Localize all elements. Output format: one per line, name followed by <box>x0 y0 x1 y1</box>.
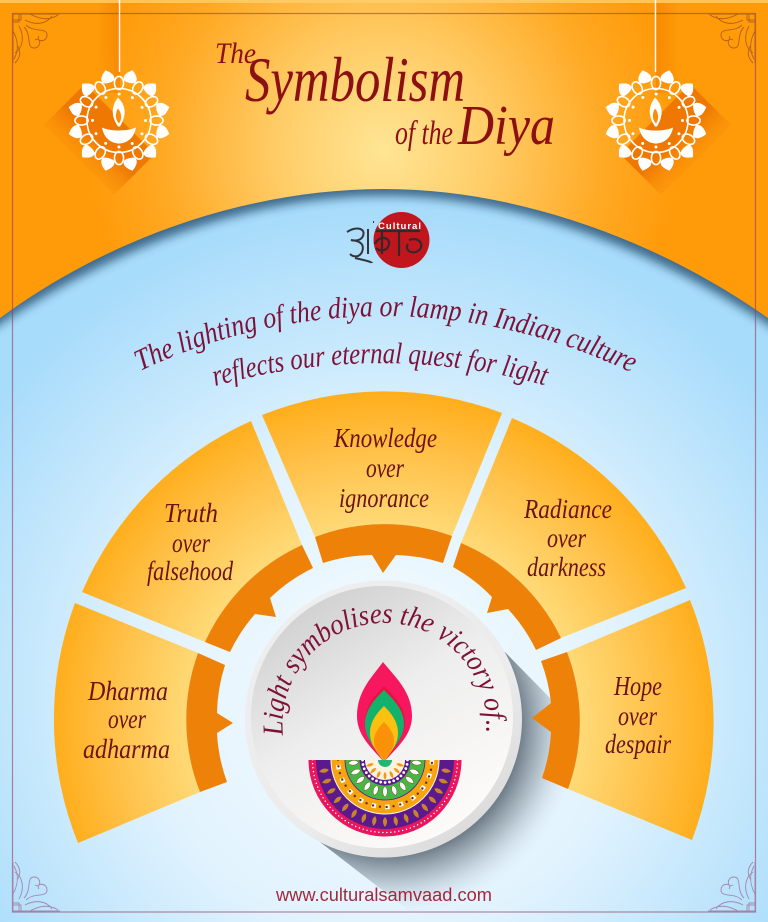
diya rangoli bowl <box>308 760 462 836</box>
segment: Knowledge over ignorance: Knowledge <box>333 423 437 453</box>
corner ornament: top left <box>13 14 60 63</box>
title: Diya <box>457 95 555 157</box>
plate long shadow <box>285 652 640 922</box>
logo: Cultural <box>378 221 421 232</box>
orange curved banner <box>0 0 768 318</box>
segment: Dharma over adharma <box>54 603 233 843</box>
hanging diya medallion: right <box>604 0 731 195</box>
segment: Knowledge over ignorance <box>262 391 502 573</box>
curved banner shadow <box>0 0 768 338</box>
segment: Radiance over darkness: over <box>547 523 586 553</box>
segment: Dharma over adharma: adharma <box>83 734 170 764</box>
hanging diya medallion: left <box>44 0 171 195</box>
title: Symbolism <box>245 44 465 115</box>
corner ornament: bottom left <box>13 862 60 911</box>
segment: Hope over despair: over <box>618 701 657 731</box>
website url: www.culturalsamvaad.com <box>275 885 492 905</box>
diya flame <box>357 662 412 762</box>
subtitle: The lighting of the diya or lamp in Indian culture <box>134 296 636 371</box>
segment: Hope over despair <box>532 600 714 840</box>
segment: Hope over despair: Hope <box>613 671 662 701</box>
segment: Knowledge over ignorance: ignorance <box>339 483 429 513</box>
segment: Dharma over adharma: over <box>108 704 146 734</box>
corner ornament: top right <box>708 14 755 63</box>
title: of the <box>395 115 453 152</box>
segment: Hope over despair: despair <box>605 729 671 759</box>
segment: Radiance over darkness: Radiance <box>523 494 612 524</box>
title <box>215 37 555 157</box>
central plate <box>245 580 522 858</box>
segment: Knowledge over ignorance: over <box>366 453 404 483</box>
segment: Dharma over adharma: Dharma <box>87 676 168 706</box>
title: The <box>215 37 256 70</box>
segment: Truth over falsehood: over <box>172 528 210 558</box>
corner ornament: bottom right <box>708 862 755 911</box>
segment: Radiance over darkness: darkness <box>527 552 606 582</box>
segment: Radiance over darkness <box>453 418 686 650</box>
segment: Truth over falsehood: falsehood <box>147 556 233 586</box>
segment: Truth over falsehood <box>82 421 313 652</box>
subtitle: reflects our eternal quest for light <box>212 342 549 388</box>
segment: Truth over falsehood: Truth <box>164 498 218 528</box>
logo <box>347 212 430 268</box>
